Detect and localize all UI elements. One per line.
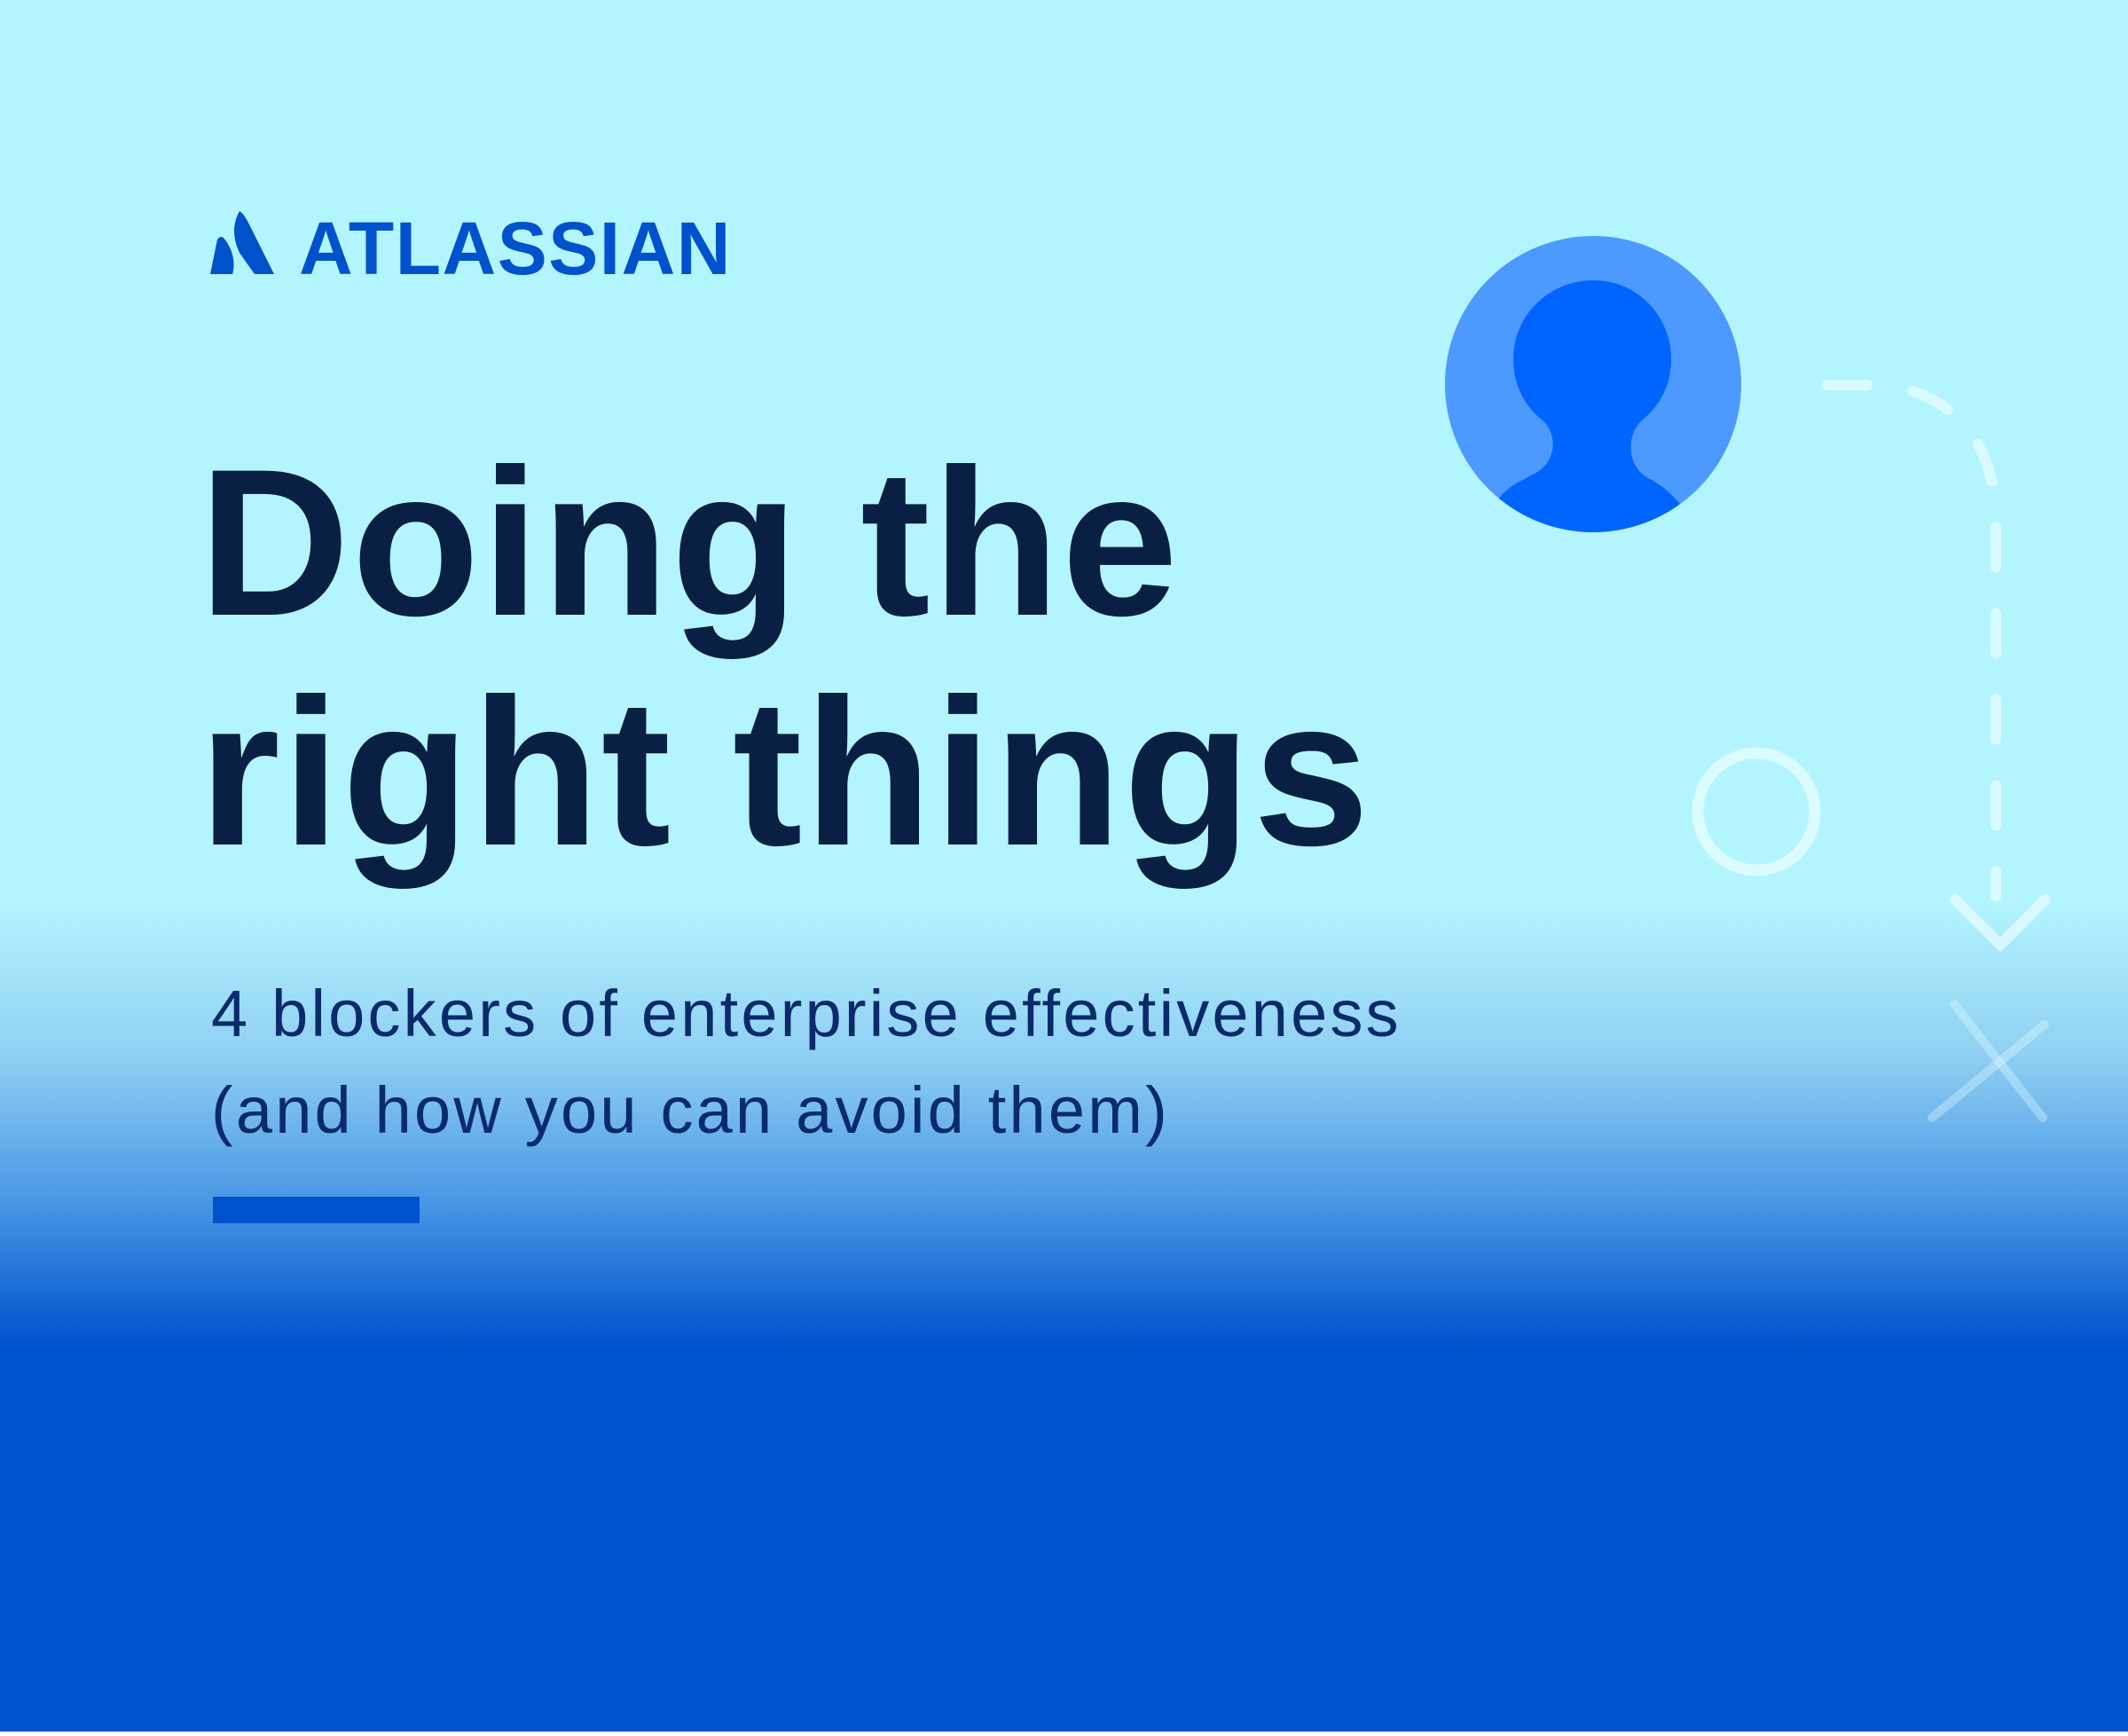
title: Doing the [199,426,1180,660]
title: right things [199,656,1371,890]
title [199,426,1371,890]
subtitle [211,977,1402,1147]
accent bar [213,1197,420,1223]
dashed vertical line [1755,951,1763,1313]
icon: X mark [1932,1004,2045,1118]
arrow: dashed curved path [1827,385,2046,945]
subtitle: 4 blockers of enterprise effectiveness [211,977,1402,1050]
subtitle: (and how you can avoid them) [211,1073,1170,1147]
icon: avatar [1445,236,1741,532]
logo: Atlassian: ATLASSIAN [299,207,732,290]
icon: circle outline [1698,753,1815,870]
